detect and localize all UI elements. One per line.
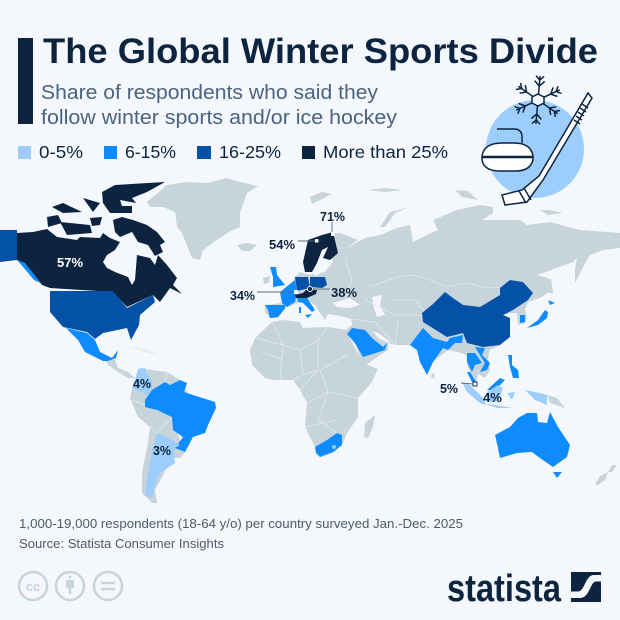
legend: More than 25% bbox=[323, 142, 448, 162]
value labels: 3% bbox=[153, 443, 171, 458]
United Kingdom bbox=[270, 267, 285, 287]
legend: 0-5% bbox=[39, 142, 83, 162]
value labels: 38% bbox=[331, 285, 357, 300]
license icons bbox=[19, 572, 122, 600]
China bbox=[422, 280, 533, 347]
title accent bar bbox=[18, 38, 33, 124]
legend bbox=[18, 142, 448, 162]
icon: curling stone bbox=[482, 129, 533, 171]
Canada bbox=[17, 182, 182, 307]
Scandinavia bbox=[303, 232, 338, 272]
India bbox=[410, 328, 463, 375]
subtitle bbox=[41, 82, 397, 129]
leader lines and markers bbox=[257, 222, 477, 386]
icon: winter sports bbox=[482, 76, 592, 205]
Saudi Arabia bbox=[347, 328, 387, 357]
Argentina bbox=[145, 433, 180, 498]
legend: 16-25% bbox=[219, 142, 281, 162]
value labels: 34% bbox=[230, 288, 255, 303]
icon: snowflake bbox=[514, 76, 562, 124]
subtitle: Share of respondents who said they bbox=[41, 82, 378, 104]
Lesotho bbox=[332, 445, 336, 449]
value labels: 5% bbox=[440, 381, 458, 396]
France bbox=[280, 280, 297, 307]
value labels: 71% bbox=[320, 209, 345, 224]
statista logo: statista bbox=[447, 568, 562, 610]
Australia bbox=[495, 412, 570, 478]
license icons: cc bbox=[26, 579, 40, 594]
Alaska panhandle bbox=[17, 260, 40, 283]
value labels: 4% bbox=[483, 390, 502, 405]
value labels: 4% bbox=[133, 376, 151, 391]
South Korea bbox=[520, 315, 525, 323]
United States bbox=[50, 291, 155, 340]
value labels: 57% bbox=[57, 255, 83, 270]
value labels: 54% bbox=[269, 237, 295, 252]
legend: 6-15% bbox=[125, 142, 176, 162]
subtitle: follow winter sports and/or ice hockey bbox=[41, 107, 397, 129]
footnote: Source: Statista Consumer Insights bbox=[19, 536, 224, 551]
world map bbox=[0, 178, 620, 503]
Poland bbox=[310, 277, 327, 288]
footnote bbox=[19, 516, 463, 551]
grey countries bbox=[105, 178, 620, 503]
Indonesia bbox=[462, 382, 547, 408]
title: The Global Winter Sports Divide bbox=[43, 32, 598, 71]
value labels bbox=[57, 209, 502, 458]
South Africa bbox=[315, 433, 342, 457]
Italy bbox=[297, 297, 315, 318]
Arctic islands bbox=[102, 182, 165, 213]
Germany bbox=[295, 277, 310, 291]
Spain bbox=[265, 305, 285, 318]
Southeast Asia bbox=[467, 347, 519, 390]
icon: hockey stick bbox=[502, 93, 592, 205]
Canada mainland bbox=[17, 229, 182, 307]
footnote: 1,000-19,000 respondents (18-64 y/o) per country surveyed Jan.-Dec. 2025 bbox=[19, 516, 463, 531]
country borders bbox=[132, 258, 500, 433]
Mexico bbox=[66, 328, 118, 361]
inland seas bbox=[312, 262, 391, 343]
icon: circle background bbox=[486, 100, 584, 198]
Colombia bbox=[132, 368, 152, 395]
Alaska bbox=[0, 230, 17, 262]
Switzerland and Austria bbox=[295, 290, 317, 298]
Japan bbox=[527, 300, 555, 328]
Brazil bbox=[145, 380, 216, 452]
